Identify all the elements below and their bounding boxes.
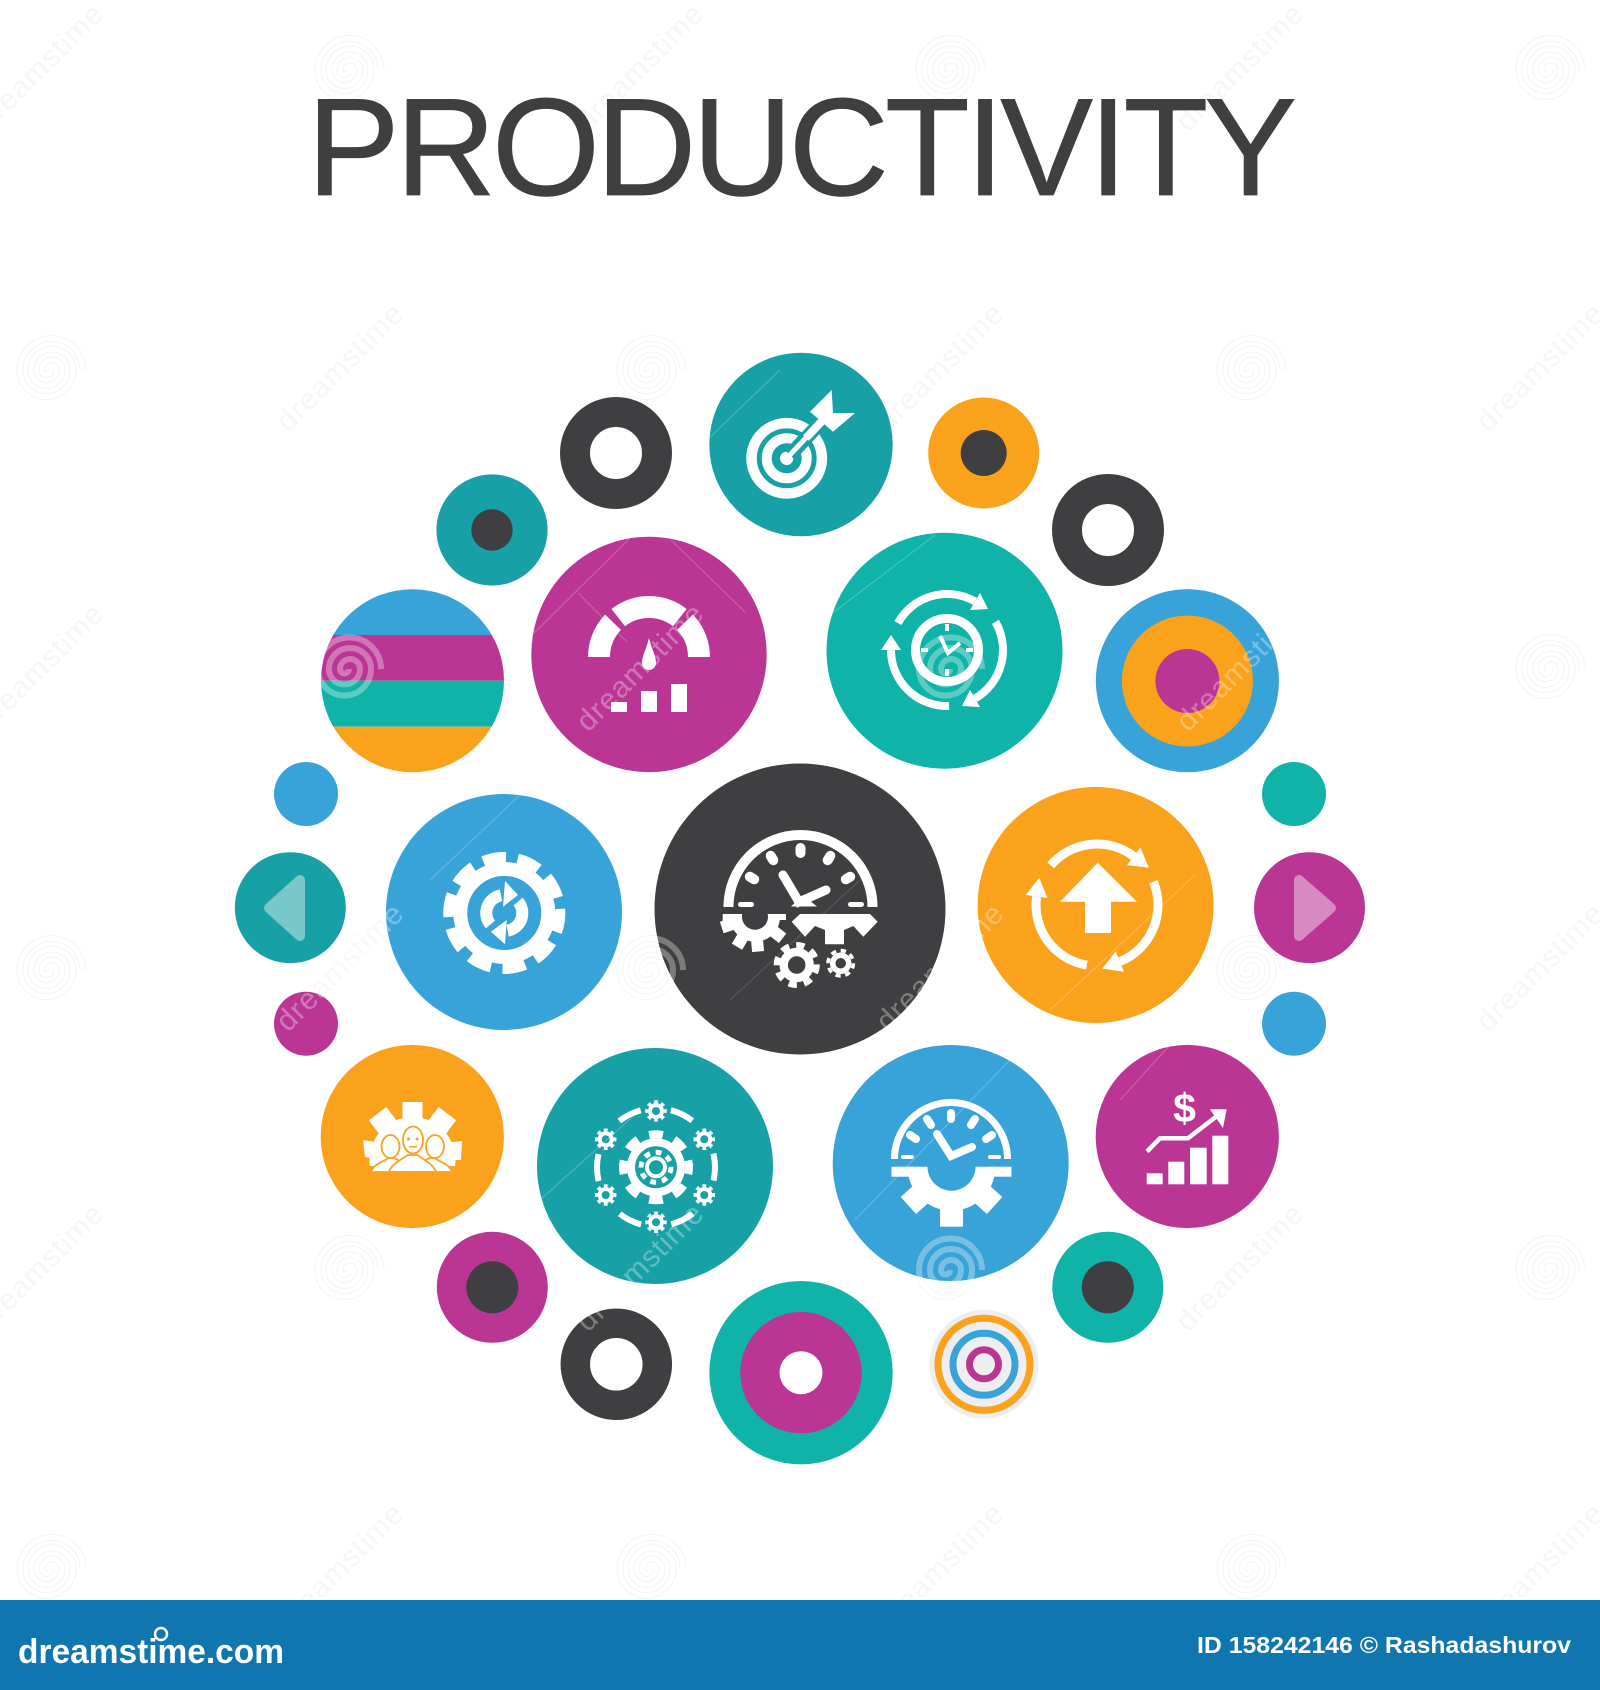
text: dreamstime	[270, 1497, 411, 1638]
text: dreamstime	[870, 897, 1011, 1038]
footer logo: dreamstime.com	[18, 1633, 284, 1671]
text: dreamstime	[270, 297, 411, 438]
icon: gear with satellite gears	[573, 1084, 739, 1250]
panel: orange dot top right	[928, 398, 1039, 508]
panel: upward cycle circle	[978, 787, 1214, 1023]
panel: teal dot bottom right	[1052, 1232, 1163, 1343]
icon: right triangle	[1299, 880, 1331, 936]
title: PRODUCTIVITY	[307, 70, 1297, 225]
panel: dark ring top right	[1067, 489, 1149, 571]
text: dreamstime	[570, 0, 711, 138]
panel: teal dot top left	[436, 474, 548, 586]
icon: rising bars with dollar	[1147, 1085, 1228, 1184]
panel: magenta dot bottom left	[437, 1232, 548, 1343]
text: dreamstime	[270, 897, 411, 1038]
text: dreamstime	[1170, 597, 1311, 738]
panel: small magenta dot	[274, 992, 338, 1056]
panel: profit chart circle	[1096, 1045, 1279, 1228]
panel: small blue dot	[274, 762, 338, 826]
panel: right arrow button	[1254, 852, 1365, 963]
panel: centre circle with dial and gears icon	[654, 764, 946, 1054]
panel: clock cycle circle	[826, 533, 1062, 769]
icon: clock with cycle arrows	[871, 574, 1023, 726]
text: dreamstime	[270, 897, 411, 1038]
panel: concentric rings bottom right	[930, 1310, 1038, 1419]
text: dreamstime	[1170, 1197, 1311, 1338]
icon: rising bars with dollar: $	[1173, 1085, 1196, 1131]
footer credit: ID 158242146 © Rashadashurov	[1197, 1632, 1571, 1658]
panel: small teal dot	[1262, 762, 1326, 826]
panel: teal and magenta circle bottom	[709, 1281, 893, 1464]
text: dreamstime	[870, 1497, 1011, 1638]
icon: up arrow with cycle arrows	[1011, 819, 1183, 991]
footer bar	[0, 1600, 1600, 1690]
panel: dark ring top left	[575, 412, 657, 494]
panel: target circle	[709, 353, 893, 536]
panel: striped circle	[320, 589, 506, 773]
text: dreamstime	[570, 1197, 711, 1338]
text: dreamstime	[1170, 0, 1311, 138]
icon: gauge and bars	[578, 586, 720, 728]
panel: left arrow button	[235, 852, 346, 963]
panel: team gear circle	[321, 1045, 504, 1228]
text: dreamstime	[870, 297, 1011, 438]
text: dreamstime	[570, 597, 711, 738]
panel: gauge circle	[531, 537, 767, 772]
panel: blue orange target circle	[1096, 589, 1279, 772]
icon: left triangle	[269, 880, 300, 936]
panel: dark ring bottom left	[575, 1323, 657, 1405]
icon: target with arrow	[752, 390, 855, 493]
panel: small blue dot right	[1262, 992, 1326, 1056]
panel: dial gear circle	[833, 1045, 1069, 1281]
icon: clock dial over gear	[892, 1102, 1012, 1227]
icon: gear with sync arrows	[445, 854, 564, 972]
panel: gear sync circle	[386, 794, 622, 1030]
icon: dial and gears	[720, 835, 878, 985]
panel: gear network circle	[537, 1048, 773, 1284]
icon: team in gear	[363, 1102, 462, 1172]
